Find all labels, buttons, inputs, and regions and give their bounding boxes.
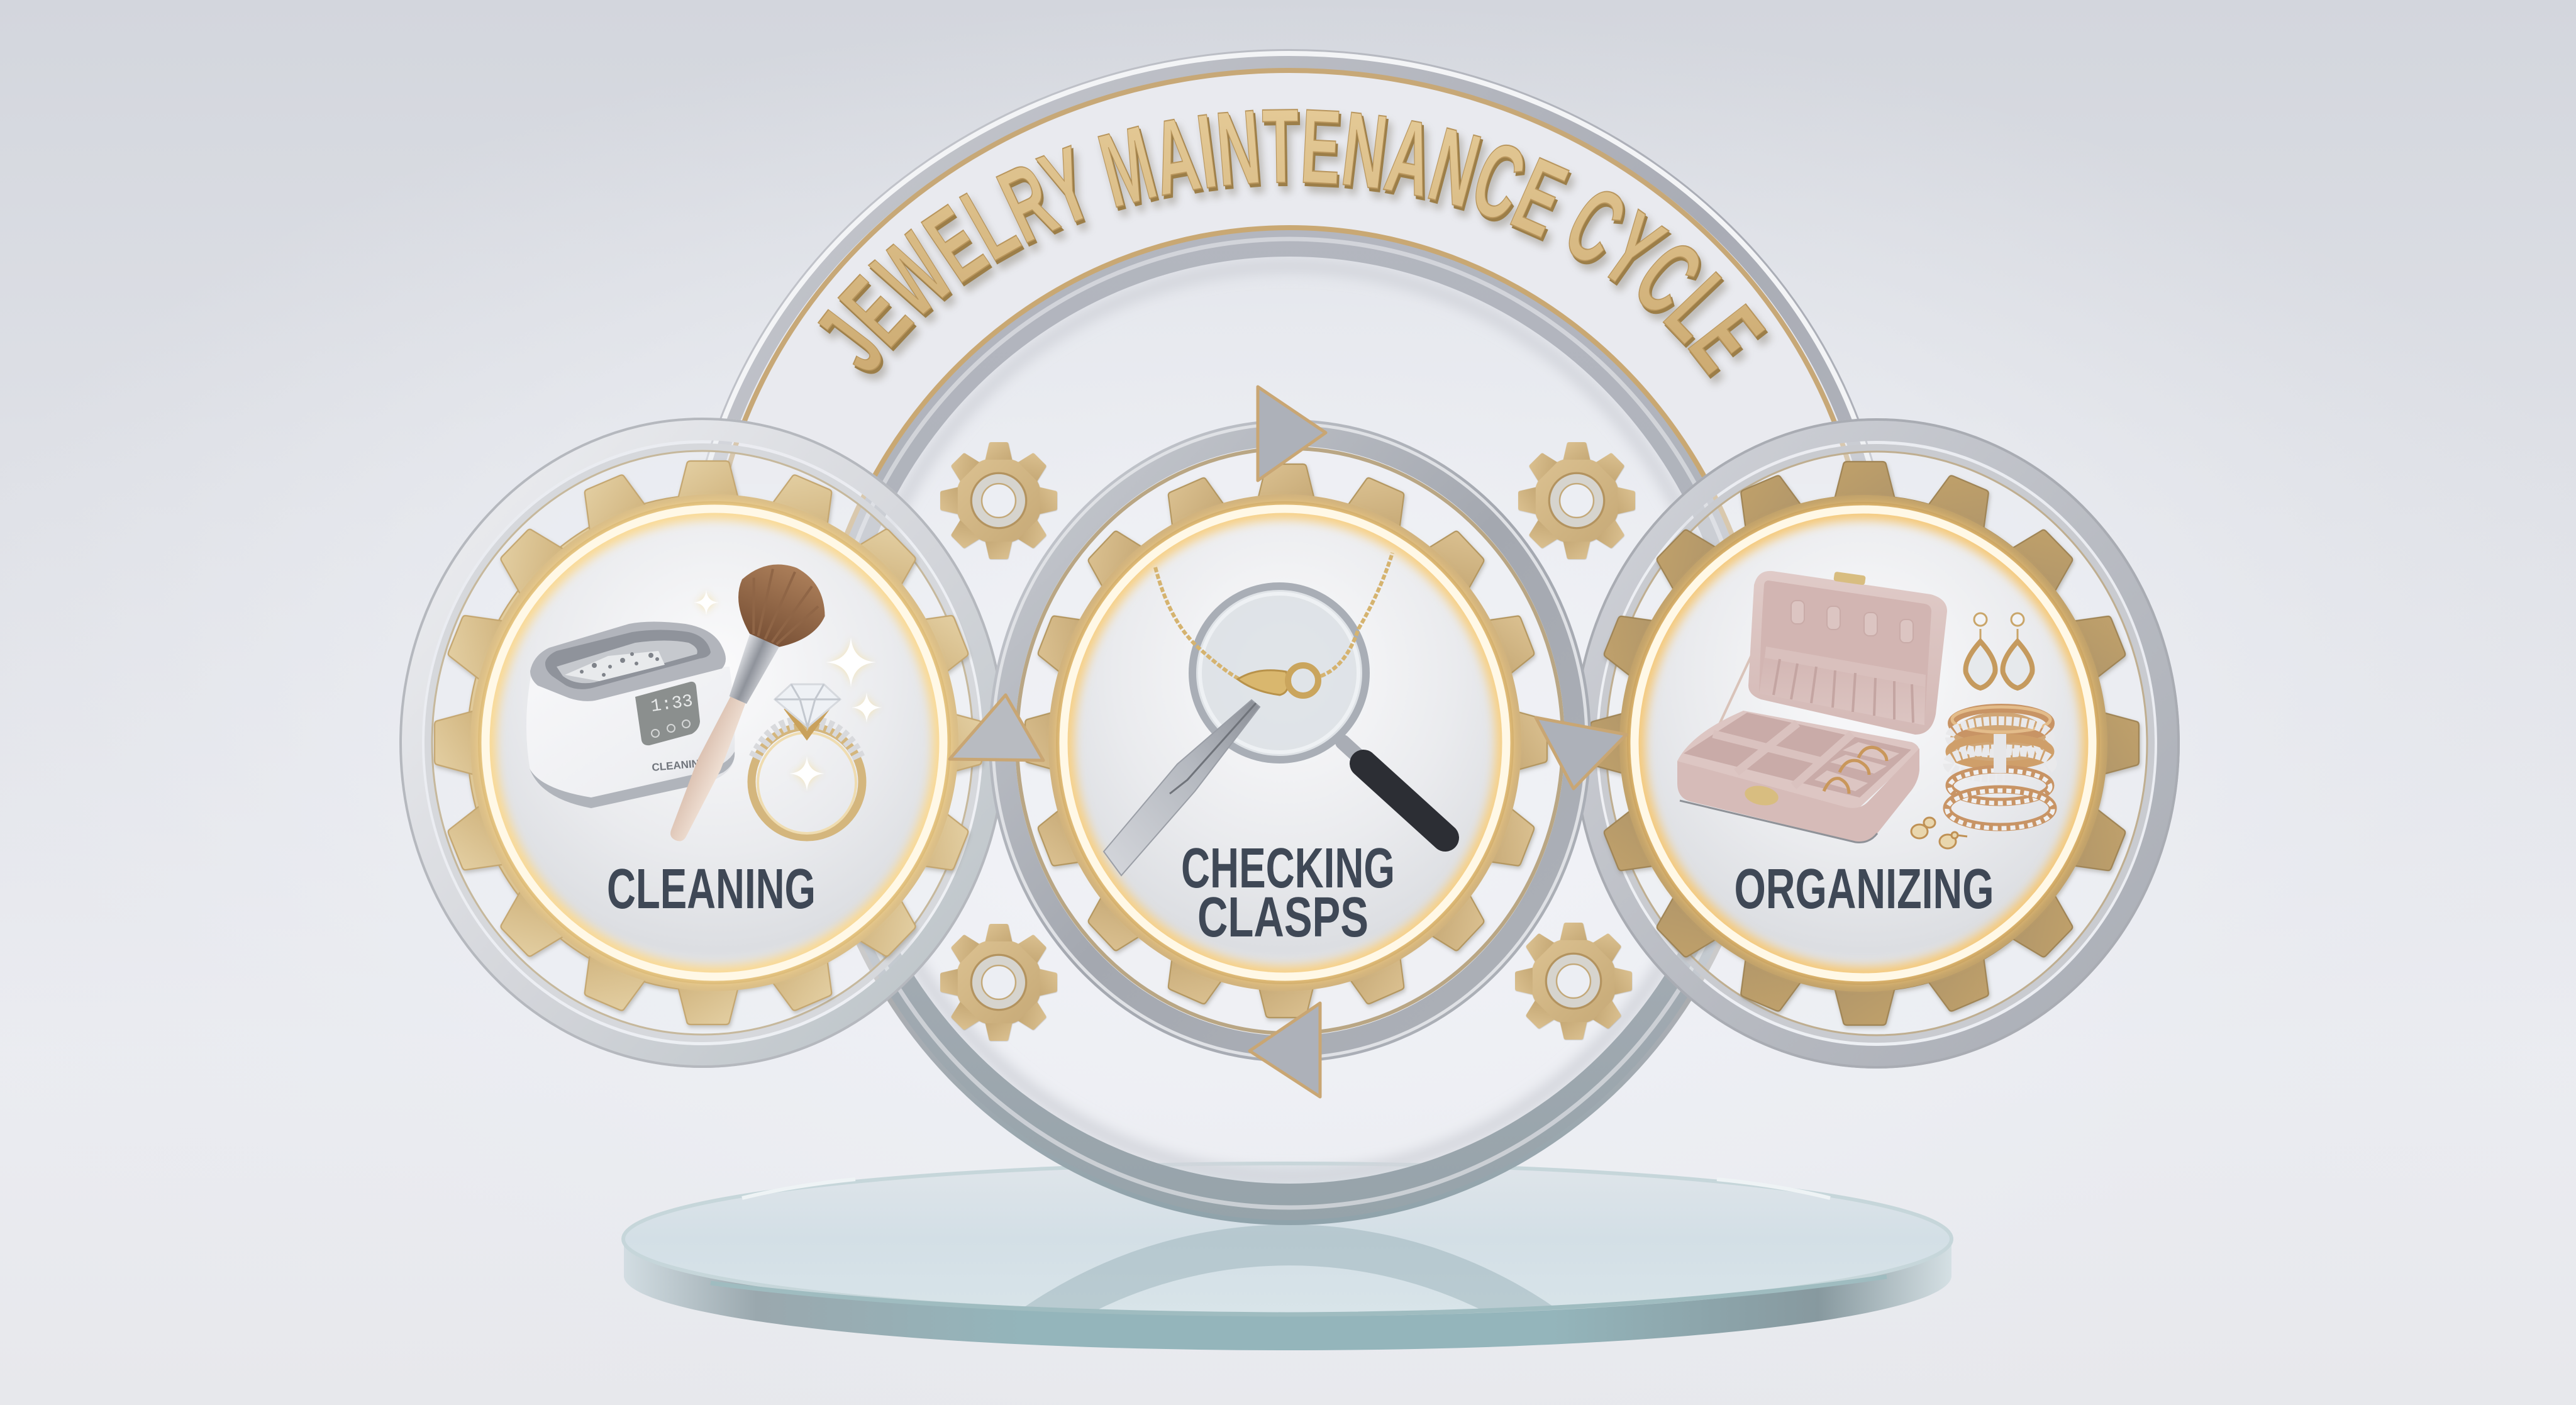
- icon: diamond ring: [752, 684, 862, 837]
- icon: small earrings: [1911, 818, 1967, 848]
- label: [1181, 837, 1395, 949]
- outer silver ring: [993, 424, 1587, 1058]
- icon: necklace with clasp: [1155, 553, 1392, 696]
- icon: ultrasonic cleaner: 1:33: [650, 692, 694, 717]
- icon: ultrasonic cleaner: [526, 621, 735, 808]
- small gear top right: [1518, 442, 1635, 559]
- panel: checking clasps: [950, 387, 1626, 1097]
- small gear bottom right: [1515, 923, 1632, 1040]
- icon: bangles: [1947, 707, 2053, 828]
- inner arch ring: [808, 226, 1770, 1225]
- icon: earrings: [1965, 613, 2033, 688]
- outer silver ring: [401, 419, 1004, 1067]
- icon: magnifier lens: [1192, 586, 1366, 760]
- icon: sparkles: [694, 590, 882, 791]
- icon: jewelry box: [1677, 571, 1947, 842]
- label: CHECKING: [1181, 837, 1395, 900]
- gold rim and glowing disc: [1619, 495, 2107, 992]
- icon: magnifier handle: [1343, 742, 1445, 838]
- glass base: [623, 1163, 1951, 1350]
- arrow: bottom: [1250, 1003, 1320, 1097]
- small gear bottom left: [940, 924, 1057, 1041]
- icon: tweezers: [1104, 700, 1260, 875]
- arrow: top: [1258, 387, 1326, 480]
- panel: organizing: [1575, 419, 2179, 1067]
- icon: ultrasonic cleaner: CLEANING: [652, 757, 708, 774]
- outer silver ring: [1575, 419, 2179, 1067]
- gold rim and glowing disc: [1048, 494, 1521, 991]
- panel: cleaning: [401, 419, 1004, 1067]
- gear: [435, 461, 982, 1025]
- label: CLASPS: [1197, 886, 1368, 949]
- label: ORGANIZING: [1735, 858, 1994, 921]
- icon: brush: [634, 550, 838, 858]
- arrow: left: [950, 695, 1043, 760]
- arrow: right: [1536, 718, 1626, 789]
- small gear top left: [940, 442, 1057, 559]
- label: CLEANING: [607, 858, 816, 921]
- title: JEWELRY MAINTENANCE CYCLE: [818, 109, 1774, 387]
- arch reflection in glass: [1016, 1225, 1563, 1313]
- gold rim and glowing disc: [470, 494, 958, 991]
- gear: [1591, 462, 2139, 1025]
- gear: [1025, 464, 1547, 1018]
